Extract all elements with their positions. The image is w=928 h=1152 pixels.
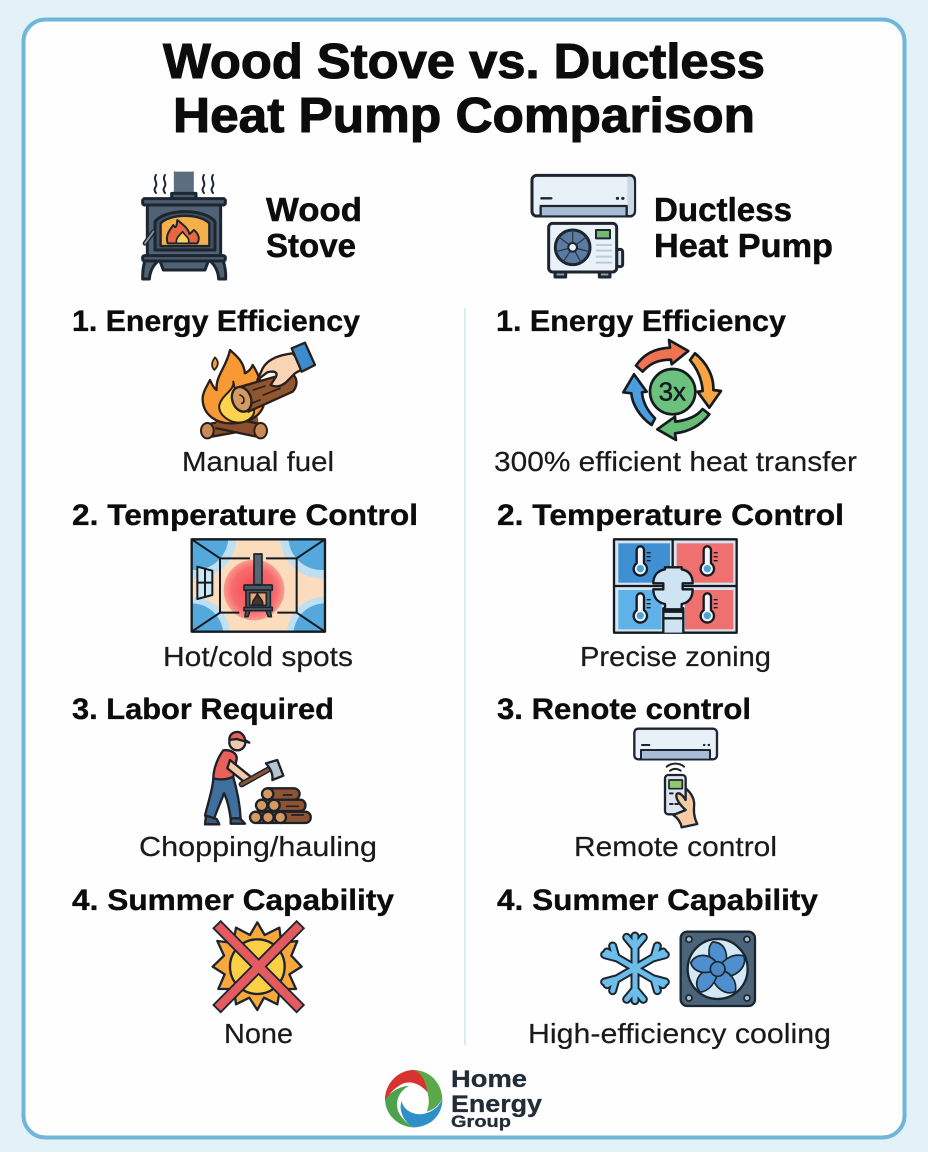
heading: Wood Stove: Wood (266, 191, 362, 228)
caption: None (224, 1018, 293, 1049)
heading: 4. Summer Capability (72, 884, 394, 917)
column header: ductless heat pump (532, 175, 833, 277)
panel: wood stove temperature control (72, 495, 418, 673)
title (163, 35, 765, 143)
icon: cooling fan (681, 932, 755, 1006)
icon: heat pump units (532, 175, 635, 277)
caption: Hot/cold spots (163, 641, 353, 672)
caption: 300% efficient heat transfer (494, 446, 857, 477)
panel: heat pump energy efficiency (494, 305, 857, 477)
panel: heat pump remote control (497, 693, 777, 862)
caption: Chopping/hauling (139, 831, 377, 862)
column header: wood stove (143, 172, 362, 279)
panel: heat pump summer capability (497, 884, 831, 1049)
caption: Precise zoning (580, 641, 771, 672)
heading: Wood Stove (266, 191, 362, 264)
logo: Home Energy Group (385, 1066, 543, 1131)
heading: 2. Temperature Control (497, 499, 844, 532)
heading: Wood Stove: Stove (266, 227, 356, 264)
icon: snowflake (605, 936, 665, 1001)
icon: room with hot and cold spots (190, 538, 326, 633)
icon: crossed-out sun (213, 922, 302, 1010)
heading: 3. Renote control (497, 693, 751, 726)
wordmark (451, 1066, 543, 1131)
heading: Ductless Heat Pump: Heat Pump (654, 227, 833, 264)
wordmark: Home (451, 1066, 527, 1093)
icon: hand placing log on fire (201, 343, 315, 438)
panel: wood stove summer capability (72, 884, 394, 1049)
heading: 3. Labor Required (72, 693, 334, 726)
icon: 3x efficiency cycle (623, 340, 721, 440)
column divider (464, 308, 466, 1045)
heading: Ductless Heat Pump (654, 191, 833, 264)
caption: High-efficiency cooling (528, 1018, 831, 1049)
panel: wood stove labor (72, 693, 377, 862)
icon: 3x efficiency cycle: 3x (659, 377, 686, 407)
heading: 1. Energy Efficiency (496, 305, 786, 338)
wordmark: Group (451, 1112, 511, 1131)
icon: zoned floor plan (614, 539, 737, 633)
title: Wood Stove vs. Ductless (163, 35, 765, 89)
icon: wood stove (143, 172, 226, 279)
heading: 4. Summer Capability (497, 884, 818, 917)
caption: Remote control (574, 831, 777, 862)
icon: remote and indoor unit (634, 729, 717, 827)
panel: wood stove energy efficiency (72, 305, 360, 477)
heading: 1. Energy Efficiency (72, 305, 360, 338)
heading: 2. Temperature Control (72, 499, 418, 532)
caption: Manual fuel (182, 446, 334, 477)
icon: man chopping wood (205, 732, 311, 824)
title: Heat Pump Comparison (173, 89, 755, 143)
panel: heat pump temperature control (497, 499, 844, 672)
icon: swirl mark (385, 1070, 442, 1127)
heading: Ductless Heat Pump: Ductless (654, 191, 792, 228)
wordmark: Energy (451, 1091, 543, 1118)
